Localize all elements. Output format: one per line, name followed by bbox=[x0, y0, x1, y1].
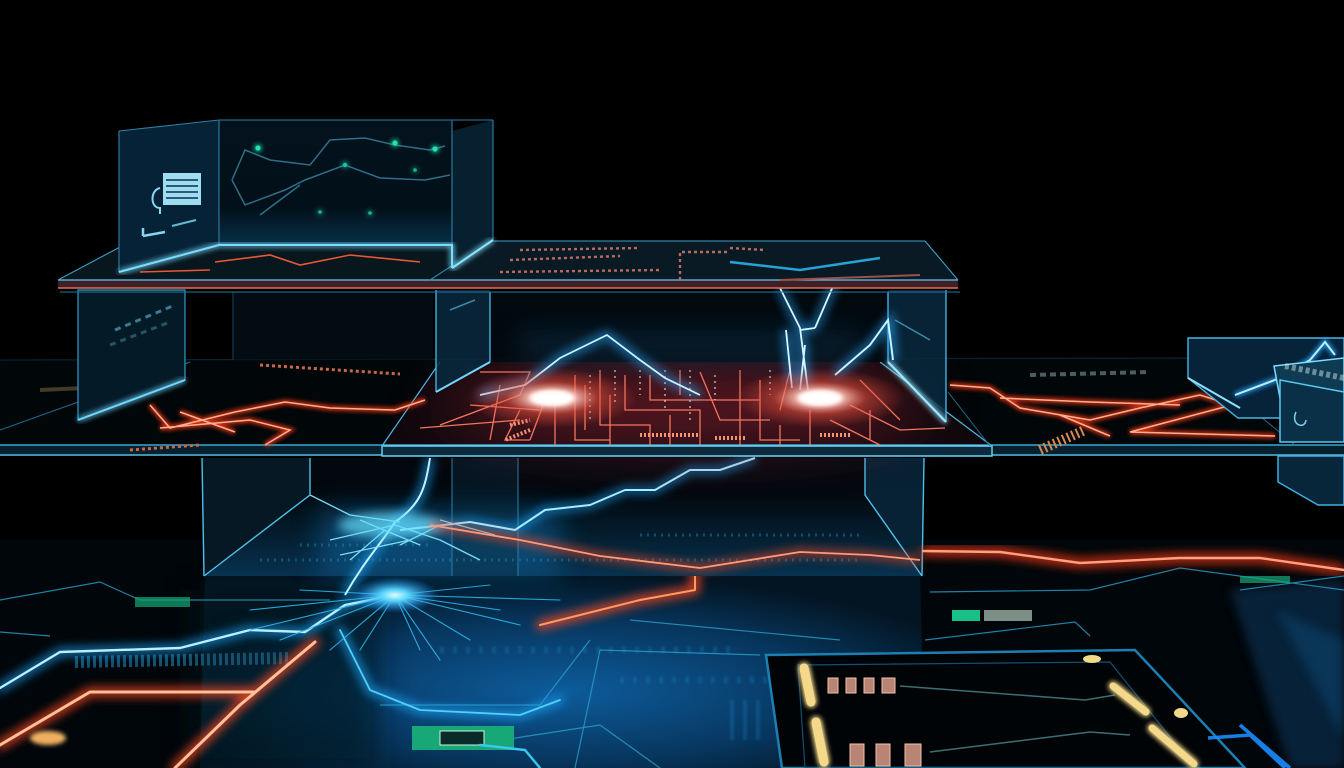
panel: lower-right circuit outline bbox=[766, 650, 1290, 768]
red circuit left bbox=[40, 365, 425, 450]
panel: upper-left support box bbox=[78, 290, 433, 420]
radial hub traces bbox=[250, 585, 560, 660]
lightning lines inside lower box bbox=[310, 458, 920, 595]
thin traces on floor bbox=[0, 568, 1344, 768]
panel: top-left glass box bbox=[119, 120, 493, 272]
dashes: lower left comb bbox=[75, 658, 290, 662]
panel: middle platform plate bbox=[0, 358, 1344, 456]
glow: hot spots bbox=[467, 368, 905, 428]
red circuit right bbox=[950, 372, 1275, 450]
panel: right-edge glass boxes bbox=[1188, 338, 1344, 505]
chart: network map with nodes bbox=[232, 138, 450, 215]
trace: red line to the right edge bbox=[922, 551, 1344, 570]
chips on floor bbox=[135, 576, 1290, 750]
panel: top platform plate bbox=[58, 241, 960, 292]
traces: bright floor lines bbox=[0, 575, 695, 768]
central dense circuit bbox=[420, 370, 945, 445]
panel: center glass box walls bbox=[436, 290, 946, 422]
floor: bottom circuit board bbox=[0, 540, 1344, 768]
icon: document on screen bbox=[143, 173, 201, 236]
chart: glowing waves in center box bbox=[480, 256, 893, 395]
panel: lower glass box bbox=[202, 458, 924, 595]
yellow pads bbox=[804, 668, 1194, 764]
